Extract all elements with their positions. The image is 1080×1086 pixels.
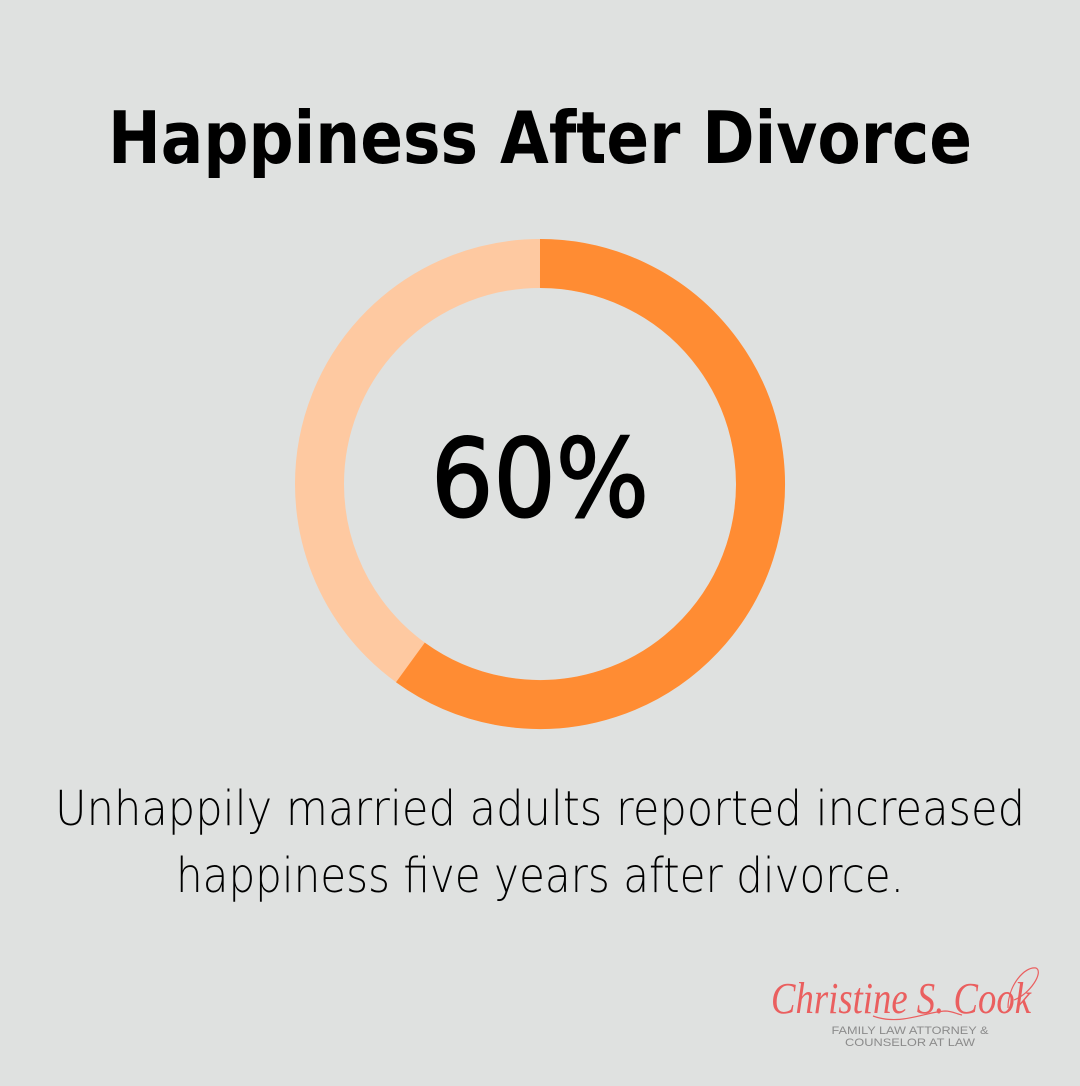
logo script name: Christine S. Cook [771, 974, 1032, 1023]
chart segment: 60% [410, 264, 760, 704]
logo tagline line 1: FAMILY LAW ATTORNEY & [832, 1025, 989, 1037]
donut chart: 60% [320, 264, 760, 704]
chart track: remaining 40% [320, 264, 760, 704]
logo: Christine S. Cook [771, 968, 1038, 1049]
description line 2: happiness five years after divorce. [176, 848, 904, 904]
logo flourish [873, 968, 1038, 1020]
title: Happiness After Divorce [108, 96, 972, 180]
center value: 60% [431, 417, 649, 542]
description text [55, 781, 1025, 904]
logo tagline line 2: COUNSELOR AT LAW [845, 1037, 976, 1049]
